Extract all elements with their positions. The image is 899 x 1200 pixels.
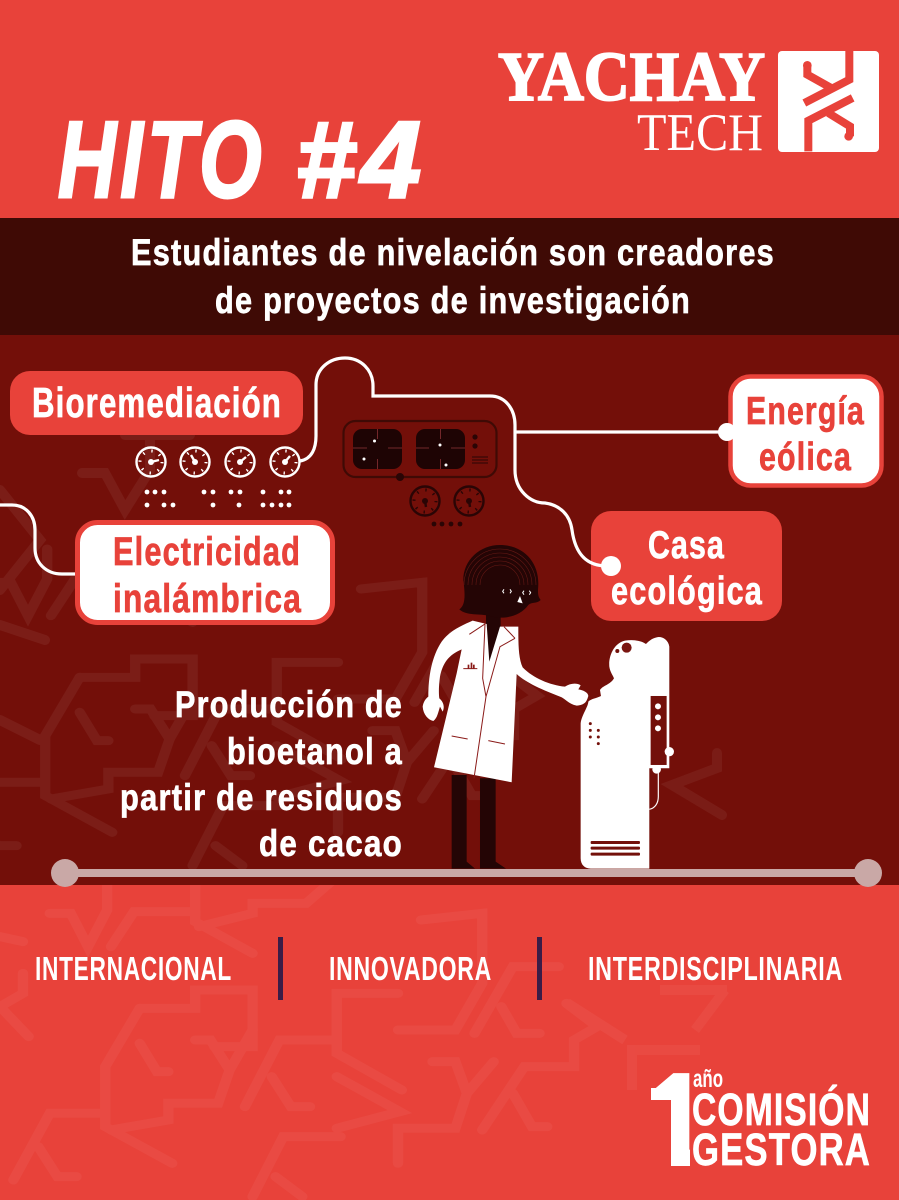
wire: main connector [300, 358, 621, 576]
heading: HITO #4: #4 [296, 99, 426, 221]
banner: subtitle band: de proyectos de investigación [215, 280, 691, 321]
label: Casa ecológica: ecológica [611, 570, 763, 613]
neck [486, 613, 501, 663]
text block: Producción de bioetanol [120, 684, 403, 864]
label: Energía eólica: Energía [746, 390, 865, 433]
label: Electricidad inalámbrica [78, 522, 332, 622]
banner: subtitle band: Estudiantes de nivelación son creadores [131, 232, 775, 273]
gauges row [136, 448, 300, 476]
label: Energía eólica: eólica [759, 436, 852, 479]
text block: Producción de bioetanol: de cacao [259, 823, 403, 864]
values: footer keywords: INTERNACIONAL [35, 950, 232, 987]
label: Electricidad inalámbrica: inalámbrica [113, 577, 302, 621]
device: control panel with screens [344, 421, 496, 481]
text block: Producción de bioetanol: Producción de [175, 684, 403, 725]
coat details [452, 624, 515, 778]
label: Casa ecológica: Casa [648, 524, 725, 567]
text block: Producción de bioetanol: partir de residuos [120, 777, 403, 818]
logo: 1 año Comisión Gestora [651, 1069, 870, 1166]
label: Energía eólica [718, 376, 882, 486]
head and hair [459, 545, 541, 618]
logo: 1 año Comisión Gestora: 1 [650, 1048, 706, 1194]
label: Bioremediación [10, 371, 303, 435]
dots: indicator rows [145, 490, 291, 507]
values: footer keywords: INNOVADORA [329, 950, 492, 987]
header background [0, 0, 899, 218]
values: footer keywords [35, 937, 843, 1000]
logo: Yachay Tech [498, 39, 879, 162]
timeline [51, 859, 882, 887]
logo: Yachay Tech: YACHAY [498, 39, 765, 116]
text block: Producción de bioetanol: bioetanol a [227, 731, 403, 772]
logo: Yachay Tech: TECH [637, 104, 763, 162]
legs [452, 775, 506, 869]
label: Electricidad inalámbrica: Electricidad [113, 530, 301, 574]
panel: footer background [0, 885, 899, 1200]
illustration: machine [581, 637, 674, 869]
illustration: scientist [423, 545, 588, 869]
banner: subtitle band [0, 218, 899, 335]
wire: left connector [0, 505, 78, 574]
lab coat [423, 621, 588, 782]
label: Casa ecológica [591, 511, 782, 621]
label: Bioremediación: Bioremediación [32, 379, 282, 426]
logo: 1 año Comisión Gestora: año [693, 1065, 723, 1093]
wire: energy branch [515, 430, 725, 434]
heading: HITO #4: HITO [58, 99, 266, 221]
gauges: dark pair [410, 486, 484, 526]
panel: main illustration background [0, 335, 899, 885]
